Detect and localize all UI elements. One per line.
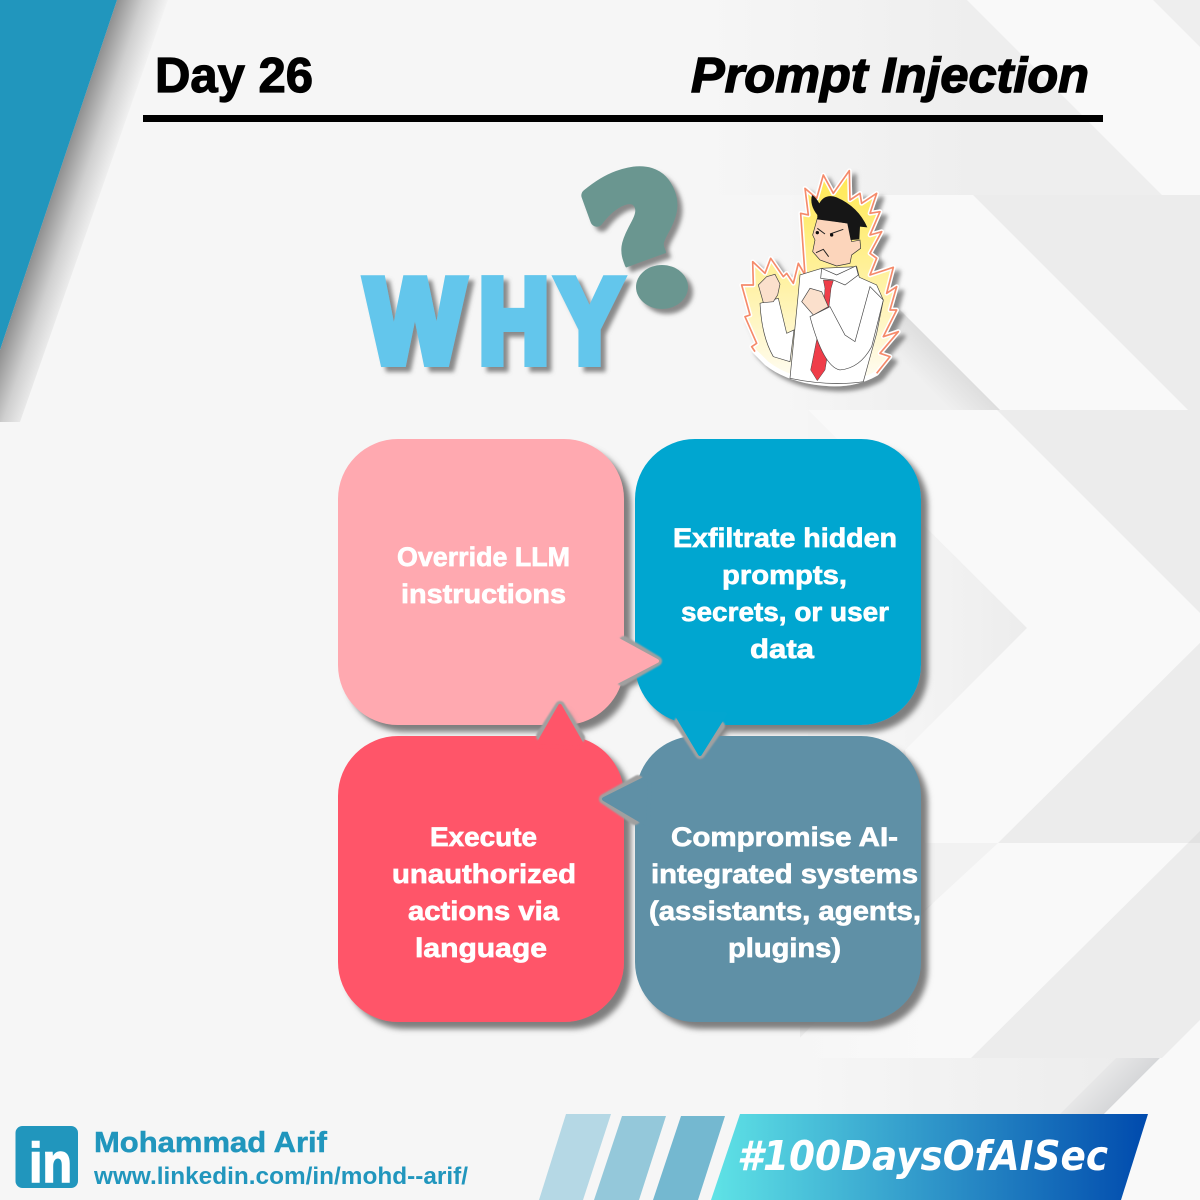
WHY lettering (366, 255, 622, 388)
pointer tails (537, 637, 725, 825)
collar (821, 266, 858, 285)
bubble: exfiltrate (635, 439, 921, 755)
tie (811, 280, 833, 381)
corner accent: blue triangle with shadow (0, 0, 168, 422)
left fist (758, 274, 780, 303)
heading: topic title: Prompt Injection (691, 49, 1089, 103)
question mark: ? (563, 129, 726, 352)
WHY lettering: Y (557, 255, 622, 388)
text: execute: actions via (408, 896, 560, 926)
eyes and mouth (816, 228, 843, 257)
question mark (581, 166, 696, 317)
footer: profile URL: www.linkedin.com/in/mohd--arif/ (93, 1163, 468, 1190)
text: compromise (649, 822, 921, 963)
footer: author name: Mohammad Arif (94, 1127, 327, 1159)
text: compromise: (assistants, agents, (649, 896, 921, 926)
text: exfiltrate: Exfiltrate hidden (673, 523, 897, 553)
heading: day number: Day 26 (155, 49, 313, 103)
text: compromise: Compromise AI- (671, 822, 898, 852)
icon: LinkedIn: in (29, 1131, 72, 1194)
bubble: compromise (603, 736, 921, 1022)
WHY lettering: H (479, 255, 549, 388)
text: exfiltrate (673, 523, 897, 664)
text: exfiltrate: prompts, (722, 560, 847, 590)
text: exfiltrate: data (750, 634, 815, 664)
text: execute: language (415, 933, 547, 963)
bubble: override LLM (338, 439, 658, 725)
text: override LLM: Override LLM (397, 542, 570, 572)
footer: hashtag banner: #100DaysOfAISec (737, 1132, 1108, 1180)
footer: decorative slanted bars (539, 1114, 725, 1200)
icon: angry businessman (742, 171, 898, 384)
text: override LLM (397, 542, 570, 609)
left arm (760, 298, 794, 362)
torso (790, 267, 883, 384)
text: execute: unauthorized (392, 859, 576, 889)
text: override LLM: instructions (401, 579, 566, 609)
text: execute (392, 822, 576, 963)
icon: flame aura (742, 171, 898, 384)
heading rule (143, 115, 1103, 122)
right arm (810, 287, 883, 370)
face (813, 218, 861, 266)
panel: speech bubble grid (338, 439, 921, 1022)
footer: hashtag banner (711, 1114, 1148, 1200)
WHY lettering: W (366, 255, 465, 388)
hair (811, 195, 867, 240)
bubble: execute (338, 704, 624, 1022)
text: compromise: plugins) (728, 933, 841, 963)
text: compromise: integrated systems (651, 859, 918, 889)
text: execute: Execute (430, 822, 537, 852)
right fist (802, 288, 828, 315)
text: exfiltrate: secrets, or user (681, 597, 889, 627)
